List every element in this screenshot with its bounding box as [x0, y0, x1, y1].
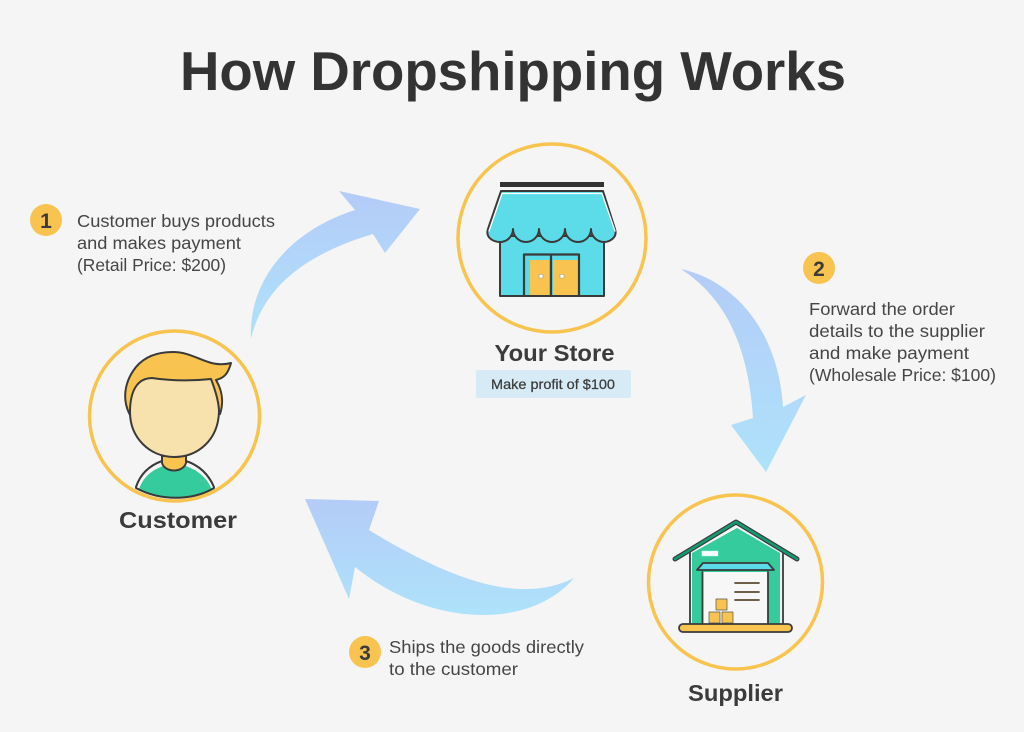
step 2 description: (Wholesale Price: $100)	[809, 365, 996, 385]
step 3 badge	[349, 636, 381, 668]
step 2 badge: 2	[813, 258, 825, 281]
arrow: supplier to customer	[305, 499, 574, 615]
profit callout: Make profit of $100	[491, 376, 615, 392]
step 3 description	[389, 637, 584, 679]
step 1 text	[30, 204, 275, 275]
step 2 badge	[803, 252, 835, 284]
step 1 badge	[30, 204, 62, 236]
step 1 description: (Retail Price: $200)	[77, 255, 226, 275]
customer ring	[90, 331, 260, 501]
step 3 description: Ships the goods directly	[389, 637, 584, 657]
profit callout	[476, 370, 631, 398]
step 2 description	[809, 299, 996, 385]
step 2 description: details to the supplier	[809, 321, 985, 341]
step 3 badge: 3	[359, 642, 371, 665]
icon: store	[487, 182, 616, 296]
icon: warehouse	[675, 522, 797, 632]
step 3 description: to the customer	[389, 659, 518, 679]
icon: customer	[125, 352, 231, 498]
panel: your store	[458, 144, 646, 398]
arrow: store to supplier	[681, 269, 806, 472]
arrow: customer to store	[251, 191, 420, 339]
step 2 description: and make payment	[809, 343, 969, 363]
store ring	[458, 144, 646, 332]
step 1 description: Customer buys products	[77, 211, 275, 231]
store label: Your Store	[494, 340, 614, 366]
step 1 description	[77, 211, 275, 275]
supplier label: Supplier	[688, 680, 783, 706]
panel: customer	[90, 331, 260, 533]
supplier ring	[648, 495, 822, 669]
title: How Dropshipping Works	[180, 40, 846, 102]
step 2 text	[803, 252, 996, 385]
step 1 badge: 1	[40, 210, 52, 233]
customer label: Customer	[119, 507, 237, 533]
panel: supplier	[648, 495, 822, 706]
step 3 text	[349, 636, 584, 679]
step 1 description: and makes payment	[77, 233, 241, 253]
step 2 description: Forward the order	[809, 299, 955, 319]
